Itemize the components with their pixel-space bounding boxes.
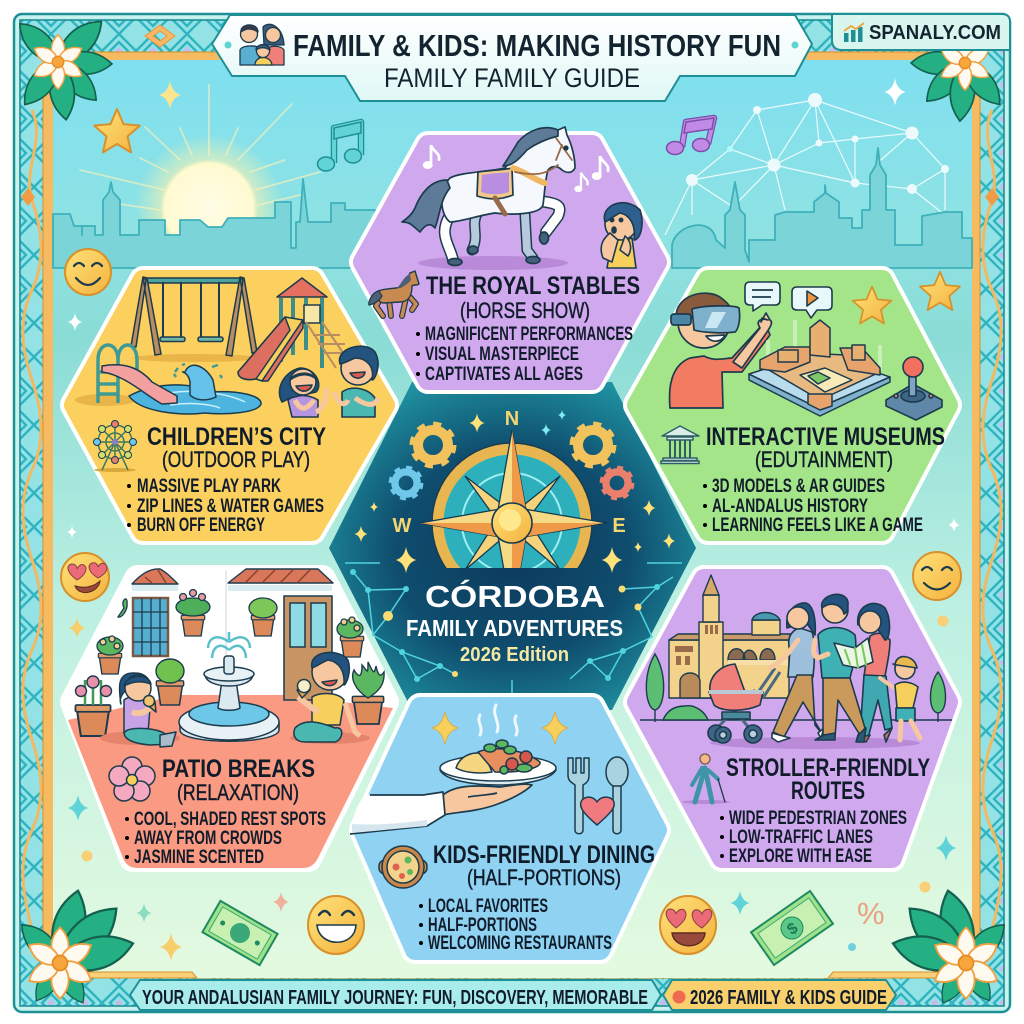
left city skyline (53, 179, 375, 268)
illustration: joystick (886, 357, 942, 420)
illustration: girl with ice cream (100, 673, 180, 747)
title banner (212, 15, 812, 101)
footer banner: journey: YOUR ANDALUSIAN FAMILY JOURNEY: FUN, DISCOVERY, MEMORABLE (142, 987, 648, 1009)
compass letters: N (505, 408, 519, 430)
corner flower bottom left (14, 887, 137, 1008)
icon: bars with arrow (844, 27, 862, 42)
icon: teal music note (318, 122, 362, 171)
icon: gold star (94, 109, 140, 152)
center title (406, 578, 623, 666)
bullets (416, 324, 633, 385)
icon: family (240, 24, 284, 65)
background stars and music notes (94, 109, 960, 310)
panel: The Royal Stables (363, 127, 657, 385)
illustration: door (284, 596, 332, 700)
illustration: stroller (708, 664, 920, 749)
compass (432, 430, 592, 568)
bullets: CAPTIVATES ALL AGES (425, 364, 583, 385)
icon: walker (682, 754, 730, 804)
bullets: VISUAL MASTERPIECE (425, 344, 579, 365)
bullets: 3D MODELS & AR GUIDES (712, 476, 885, 497)
bullets (703, 476, 923, 536)
heading: CHILDREN’S CITY (147, 423, 326, 451)
bullets: LOCAL FAVORITES (428, 896, 548, 917)
icon: fork, spoon and heart (568, 757, 628, 834)
sparkles (355, 414, 675, 573)
logo badge (832, 14, 1010, 50)
speech bubbles (745, 282, 832, 318)
bullets: EXPLORE WITH EASE (729, 846, 872, 867)
bullets (419, 896, 612, 954)
music notes (423, 145, 439, 169)
icon: purple music note (666, 118, 714, 154)
bullets: ZIP LINES & WATER GAMES (137, 496, 324, 517)
icon: ferris wheel (94, 420, 136, 472)
woman with stroller (770, 603, 824, 742)
illustration: white horse (402, 127, 575, 270)
compass letters (393, 408, 626, 537)
corner flower top right (911, 36, 1008, 122)
subheading: (RELAXATION) (177, 780, 299, 805)
bullets: LOW-TRAFFIC LANES (729, 827, 873, 848)
steam (479, 705, 517, 735)
percent sign: % (857, 896, 885, 931)
illustration: potted plants on floor (75, 659, 384, 736)
emoji: smile right (913, 552, 961, 600)
heading: PATIO BREAKS (162, 755, 315, 783)
illustration: walking family (770, 594, 920, 742)
icon: small brown horse (369, 271, 419, 316)
icon: dollar bill right (751, 891, 833, 965)
center title: FAMILY ADVENTURES (406, 615, 623, 641)
corner flower top left (12, 12, 112, 121)
compass letters: W (393, 515, 412, 537)
panel: Stroller-Friendly Routes (637, 575, 952, 867)
bullets: WIDE PEDESTRIAN ZONES (729, 808, 907, 829)
panel: Interactive Museums (637, 280, 948, 536)
ground line (640, 719, 952, 721)
heading: STROLLER-FRIENDLY (726, 754, 930, 782)
bullets: HALF-PORTIONS (428, 915, 537, 936)
right city skyline with mosque and bell tower (672, 148, 972, 268)
illustration: laughing kids (279, 346, 378, 417)
subheading: (OUTDOOR PLAY) (162, 447, 310, 472)
heading: THE ROYAL STABLES (426, 272, 640, 300)
panel: Patio Breaks (68, 569, 393, 868)
illustration: boy with ice cream (290, 652, 370, 744)
bullets: WELCOMING RESTAURANTS (428, 933, 612, 954)
subheading: (HALF-PORTIONS) (467, 865, 621, 890)
heading: KIDS-FRIENDLY DINING (433, 841, 655, 869)
bullets: AL-ANDALUS HISTORY (712, 496, 868, 517)
illustration: historic building (669, 575, 790, 698)
icon: dollar bill right: $ (784, 920, 801, 939)
illustration: serving hand and sleeve (350, 784, 532, 834)
illustration: child with VR headset (670, 293, 771, 408)
emoji: smile top left (65, 249, 111, 295)
network lines (345, 563, 682, 695)
illustration: trees (646, 654, 946, 722)
bullets: COOL, SHADED REST SPOTS (134, 809, 326, 830)
illustration: plate of food (440, 740, 556, 785)
illustration: window (133, 598, 168, 656)
map (834, 638, 873, 668)
illustration: 3D city model (749, 320, 890, 416)
child (880, 657, 920, 740)
bullets (125, 809, 326, 868)
emoji: heart eyes left (61, 553, 109, 601)
bullets: LEARNING FEELS LIKE A GAME (712, 515, 923, 536)
sun with rays (80, 85, 320, 282)
illustration: wall pots (97, 590, 364, 674)
illustration: roof tiles (132, 569, 333, 591)
corner flower bottom right (889, 887, 1012, 1008)
central hexagon: Cordoba compass (329, 382, 696, 710)
bullets: MAGNIFICENT PERFORMANCES (425, 324, 633, 345)
center title: CÓRDOBA (425, 578, 605, 614)
panel: Children's City (74, 277, 385, 536)
bullets: BURN OFF ENERGY (137, 515, 265, 536)
gears (390, 424, 633, 499)
icon: paella pan (379, 846, 427, 888)
subtitle text: FAMILY FAMILY GUIDE (384, 63, 640, 93)
footer banner: guide (663, 980, 896, 1010)
heading: INTERACTIVE MUSEUMS (706, 423, 945, 451)
panel: Kids-Friendly Dining (350, 705, 657, 954)
illustration: fountain (179, 632, 279, 741)
patio floor (68, 695, 393, 868)
man (813, 594, 866, 742)
subheading: (HORSE SHOW) (460, 298, 590, 323)
center title: 2026 Edition (460, 644, 569, 666)
bullets (127, 476, 324, 536)
icon: right gold star (920, 272, 960, 310)
decorative sparkles and dots (67, 78, 960, 961)
emoji: heart eyes bottom (660, 896, 716, 954)
illustration: pool and small slide (75, 345, 261, 414)
illustration: play tower with slide (238, 278, 352, 381)
logo text: SPANALY.COM (869, 22, 1001, 44)
constellation network (665, 93, 949, 235)
bullets: MASSIVE PLAY PARK (137, 476, 281, 497)
footer banner: journey (130, 980, 661, 1010)
title text: FAMILY & KIDS: MAKING HISTORY FUN (293, 28, 781, 63)
subheading: (EDUTAINMENT) (755, 447, 893, 472)
emoji: big laugh bottom (308, 896, 364, 954)
woman with map (858, 603, 892, 742)
illustration: amazed boy (601, 203, 642, 268)
heading second line: ROUTES (791, 777, 865, 805)
icon: dollar bill left (202, 901, 278, 965)
bullets: JASMINE SCENTED (134, 847, 264, 868)
icon: star (853, 287, 891, 323)
illustration: swing set (131, 277, 257, 362)
footer banner: guide: 2026 FAMILY & KIDS GUIDE (690, 987, 887, 1009)
bullets (720, 808, 907, 867)
bullets: AWAY FROM CROWDS (134, 828, 282, 849)
compass letters: E (612, 515, 626, 537)
icon: museum (661, 426, 699, 464)
icon: pink flower (109, 757, 155, 801)
sparkles (432, 712, 568, 744)
